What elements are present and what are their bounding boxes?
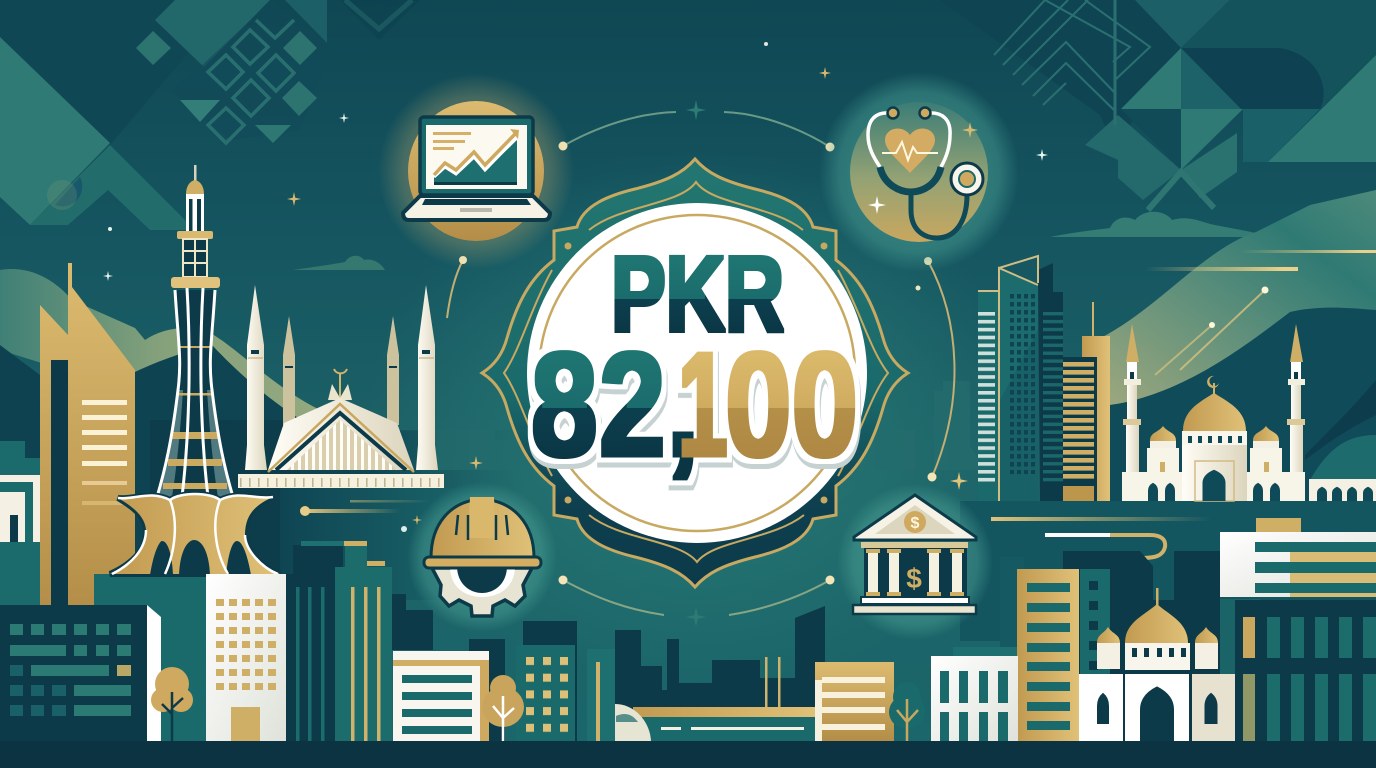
right hills [960, 190, 1376, 641]
dark block with windows [0, 605, 161, 742]
icon: bank with dollar [837, 484, 993, 640]
left striped tower [978, 292, 1000, 501]
mosque top right [1122, 324, 1376, 501]
headline amount [531, 321, 858, 487]
teal building with gold windows [516, 645, 615, 741]
tree gold left [151, 667, 193, 741]
headline amount: 00 [725, 321, 858, 487]
icon: stethoscope with heart [819, 72, 1019, 272]
central platform [615, 657, 815, 741]
Minar-e-Pakistan tower [110, 165, 280, 575]
icon: laptop growth chart [378, 73, 574, 269]
skyline right top [978, 256, 1110, 501]
tower flower base [110, 494, 280, 574]
central medallion frame [482, 159, 908, 587]
top-left geometric pattern [0, 0, 420, 230]
top-right geometric pattern [940, 0, 1376, 210]
mid skyline silhouettes [469, 606, 825, 741]
icon: bank with dollar: $ [911, 515, 920, 532]
inner minarets [283, 316, 399, 425]
tree gold centre [482, 675, 524, 741]
icon: hard hat and gear [407, 482, 557, 632]
side arcade [1309, 479, 1376, 501]
gold office with teal windows [1017, 569, 1110, 741]
bottom right columns building [1200, 599, 1376, 741]
roof [339, 374, 341, 398]
headline amount: 1 [678, 322, 727, 487]
gold tower [1082, 336, 1110, 501]
main dome [1207, 376, 1219, 388]
left hills [0, 269, 530, 605]
small domes [1150, 426, 1176, 441]
portal [1182, 445, 1247, 501]
platform [238, 474, 444, 488]
faint centre skyline [430, 381, 985, 470]
Faisal mosque [238, 285, 444, 488]
connecting arcs and nodes [447, 112, 954, 615]
gold tower left [40, 263, 135, 610]
outer minarets [245, 285, 438, 470]
gold building with cream stripes [815, 662, 894, 741]
icon: bank with dollar: $ [906, 563, 922, 594]
bottom right dark backdrop [1000, 551, 1220, 741]
dark tower [1038, 263, 1063, 501]
back towers [94, 541, 433, 744]
headline PKR: PKR [611, 233, 784, 354]
minarets [1123, 324, 1305, 501]
right block with bars [1220, 518, 1376, 597]
bottom band [0, 741, 1376, 768]
white office with gold windows [206, 574, 286, 741]
white building right of centre [931, 647, 1018, 741]
left low buildings [0, 441, 40, 610]
mosque bottom right [1079, 588, 1235, 741]
clouds [293, 212, 1270, 270]
headline amount: 82, [531, 321, 700, 487]
tree teal [889, 682, 925, 741]
gold ground lines [300, 500, 1211, 558]
gold shooting lines [1145, 250, 1376, 375]
medallion white disc [527, 203, 867, 543]
wall [1122, 472, 1305, 501]
sparkle stars [103, 42, 1048, 627]
main glass tower [1000, 268, 1038, 501]
white building with teal bars [393, 651, 489, 741]
